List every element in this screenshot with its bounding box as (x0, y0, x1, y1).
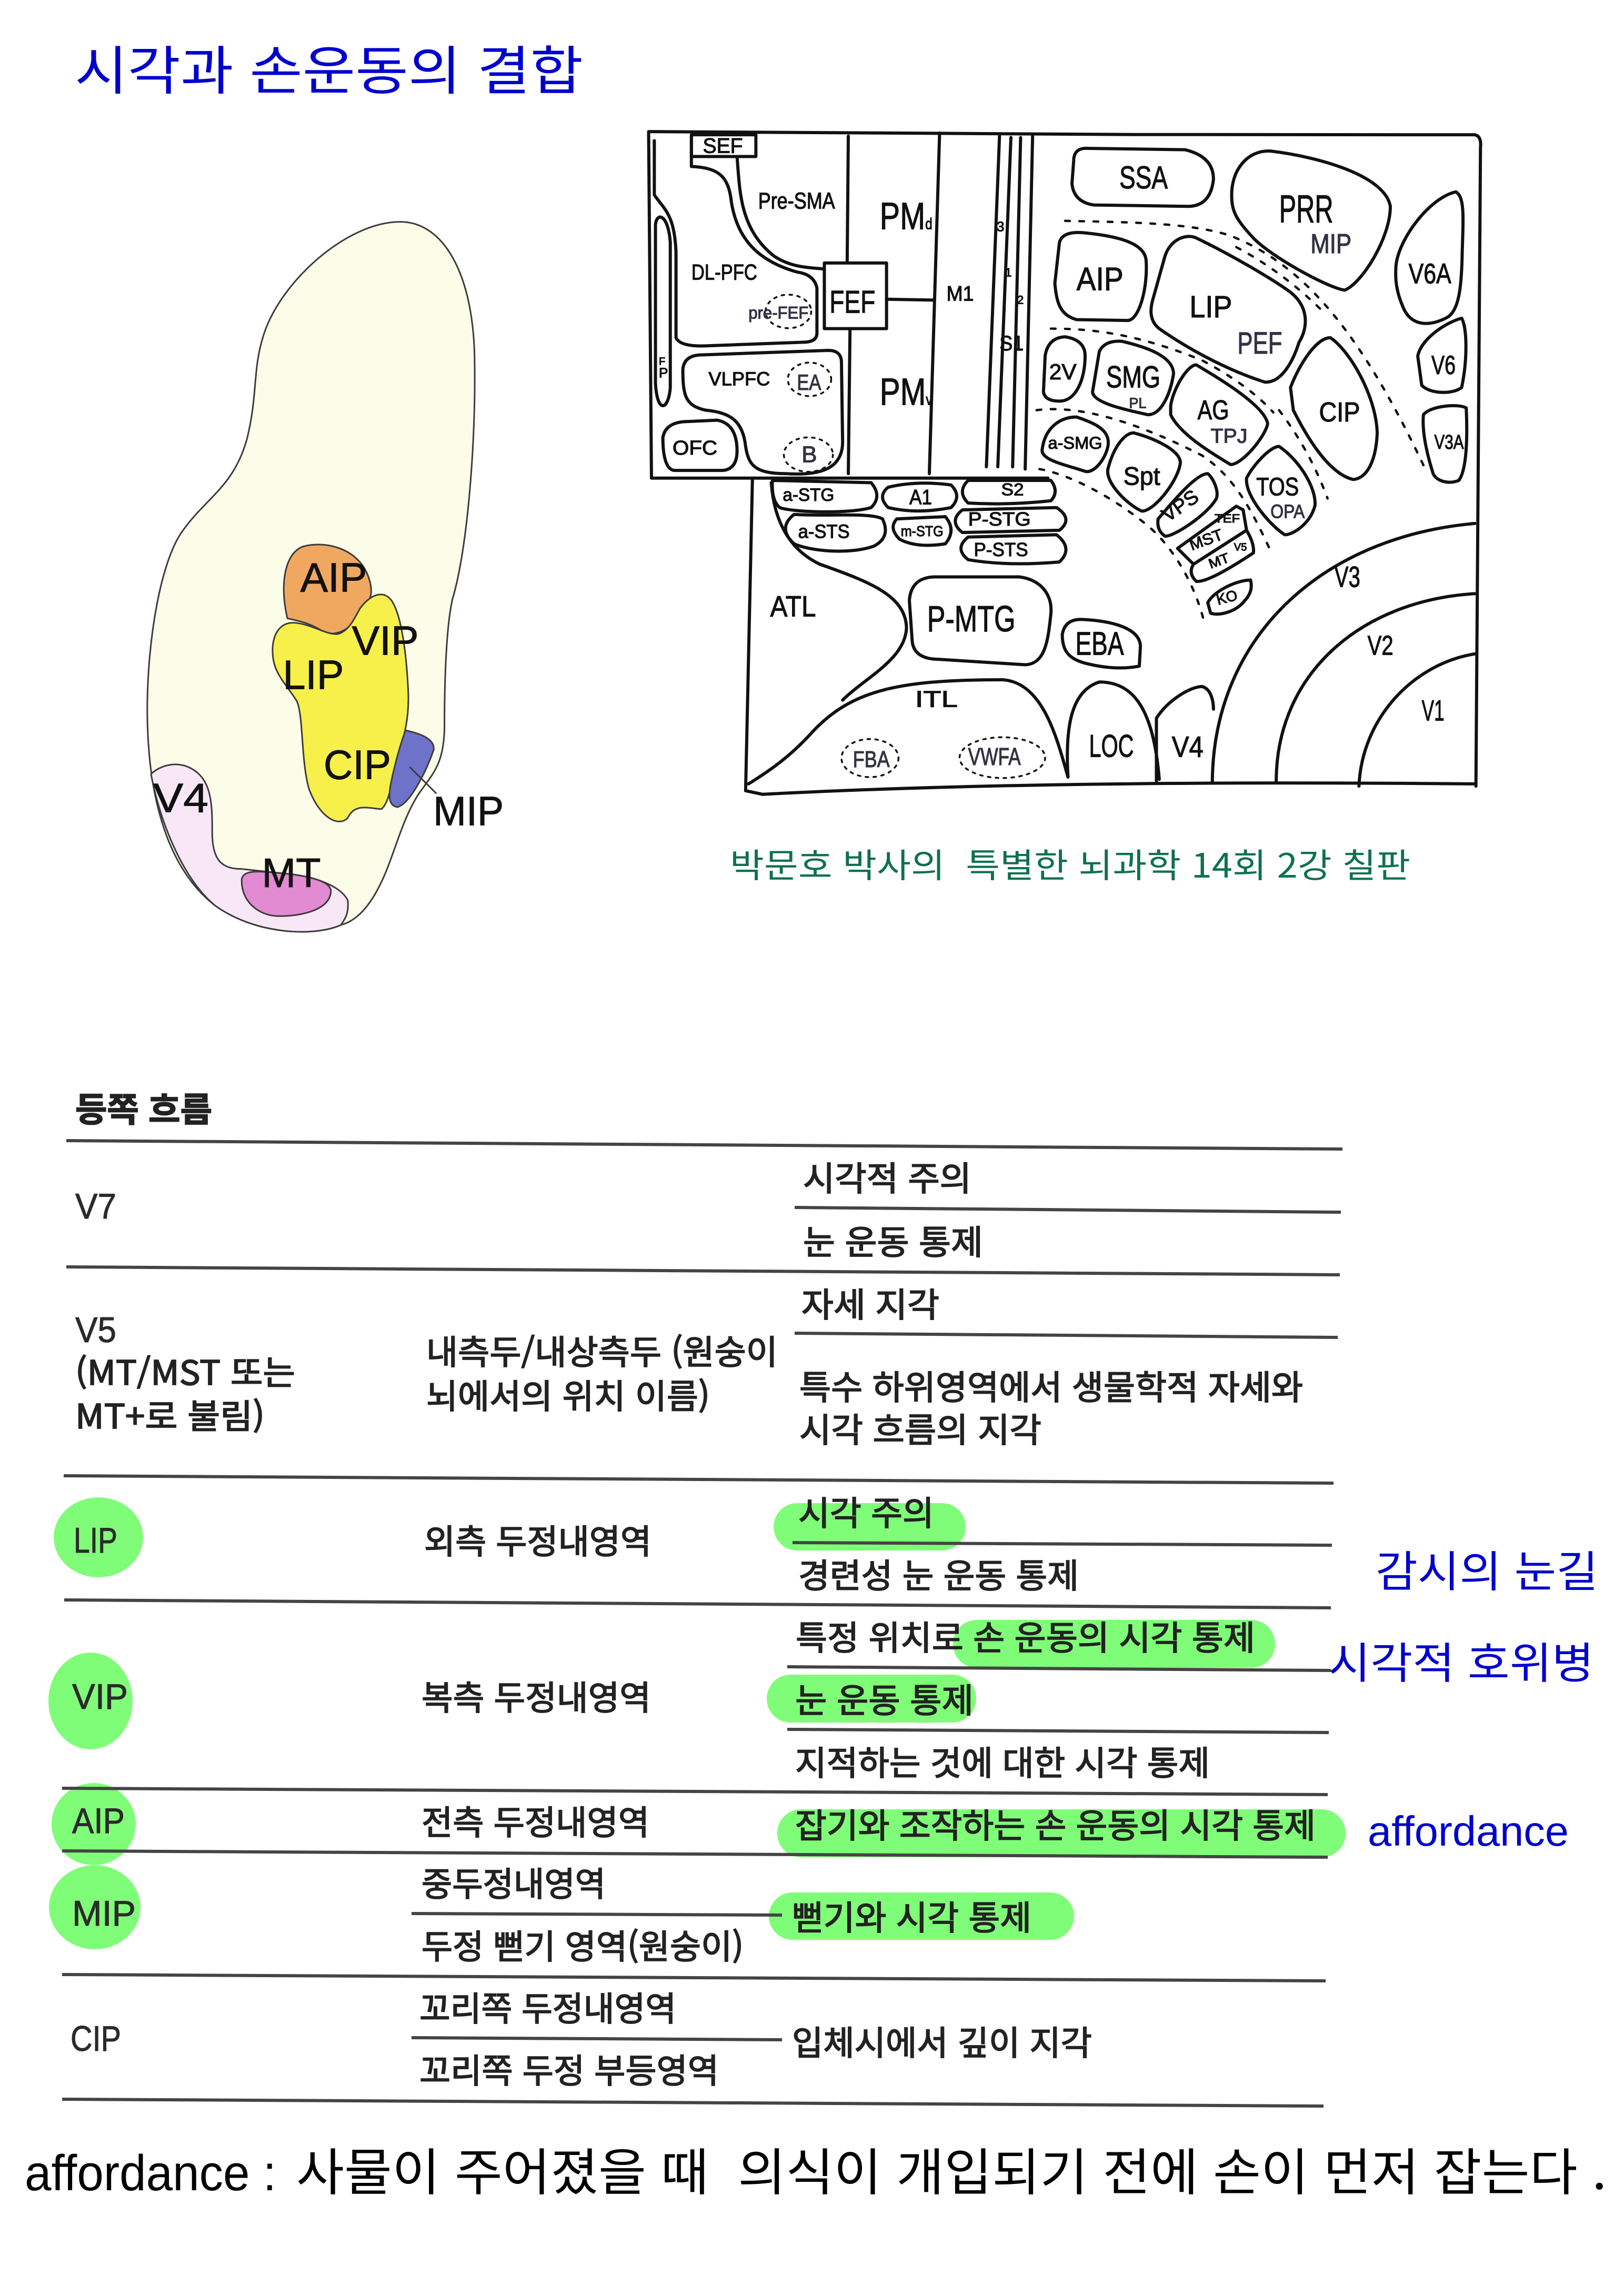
row: CIP: CIP (71, 2019, 121, 2059)
row: VIP: VIP (72, 1677, 128, 1717)
row: V5: 자세 지각 (801, 1278, 939, 1327)
region: MST / TEF: MST (1187, 526, 1225, 554)
area: MT: MT (262, 850, 321, 896)
region: EA: EA (797, 370, 821, 395)
region: a-STS (786, 515, 885, 551)
label: DL-PFC: DL-PFC (691, 260, 757, 285)
row: CIP: 꼬리쪽 두정 부등영역 (419, 2045, 719, 2093)
region: V6: V6 (1431, 350, 1456, 380)
row: LIP: LIP (74, 1520, 117, 1560)
region: A1 (883, 483, 957, 511)
region: P-MTG (909, 577, 1051, 665)
row: CIP: 꼬리쪽 두정내영역 (419, 1982, 676, 2031)
region: B (784, 437, 833, 472)
row: MIP: MIP (72, 1894, 136, 1934)
region: TOS / OPA: TOS (1256, 474, 1299, 501)
row: AIP: AIP (72, 1801, 125, 1841)
area: MIP (389, 730, 504, 834)
region: B: B (801, 442, 817, 468)
area: LIP VIP CIP: LIP (283, 651, 344, 698)
row: LIP: 시각 주의 (798, 1487, 934, 1535)
row: LIP: 경련성 눈 운동 통제 (798, 1549, 1079, 1598)
map frame (649, 132, 1481, 794)
region: KO: KO (1215, 587, 1239, 608)
region: TOS / OPA (1247, 447, 1315, 535)
region: ATL: ATL (770, 589, 816, 622)
region: V3A: V3A (1434, 431, 1464, 454)
frontal lines (654, 133, 1032, 474)
footnote: affordance definition: affordance : (25, 2145, 276, 2201)
annotation: gaze of surveillance: 감시의 눈길 (1376, 1537, 1598, 1599)
row: AIP: 잡기와 조작하는 손 운동의 시각 통제 (795, 1799, 1316, 1848)
row: V7: 눈 운동 통제 (803, 1216, 983, 1264)
area: MT (242, 850, 331, 916)
region: CIP: CIP (1319, 397, 1360, 428)
region: LIP / PEF: LIP (1189, 290, 1232, 324)
region: FP: F (659, 356, 665, 368)
table rules (62, 1141, 1342, 2106)
row: CIP (71, 1982, 1092, 2093)
region: KO (1208, 580, 1251, 614)
row: V5: 특수 하위영역에서 생물학적 자세와 (799, 1361, 1303, 1409)
region: MST / TEF (1178, 506, 1247, 564)
row: V7: 시각적 주의 (803, 1152, 971, 1201)
row: LIP (74, 1487, 1079, 1598)
region: S2: S2 (1001, 480, 1024, 499)
labels: S1 subdivisions (997, 219, 1024, 355)
region: a-STG (773, 480, 877, 512)
region: PRR / MIP (1231, 151, 1390, 290)
region: pre-FEF: pre-FEF (748, 304, 808, 323)
region: V3: V3 (1335, 560, 1360, 593)
region: FBA (841, 739, 898, 777)
region: SEF (691, 135, 756, 158)
region: a-STS: a-STS (798, 520, 850, 542)
region: V1 (1359, 654, 1475, 786)
labels: S1 subdivisions: 3 (997, 219, 1004, 235)
area: V4: V4 (153, 774, 208, 821)
region: Spt: Spt (1124, 463, 1160, 491)
region: EBA: EBA (1076, 626, 1124, 662)
region: ATL (770, 482, 907, 700)
title: 시각과 손운동의 결합 (75, 28, 583, 105)
region: AIP (1055, 233, 1146, 320)
region: Spt (1108, 433, 1180, 511)
area: LIP VIP CIP: VIP (352, 618, 419, 664)
row: V5: 내측두/내상측두 (원숭이 (426, 1326, 778, 1374)
region: VWFA (959, 737, 1045, 778)
region: VLPFC: VLPFC (708, 368, 770, 389)
region: VPS (1158, 474, 1217, 536)
annotation: visual bodyguard: 시각적 호위병 (1328, 1628, 1594, 1691)
row: CIP: 입체시에서 깊이 지각 (792, 2017, 1092, 2065)
region: SSA: SSA (1119, 160, 1168, 195)
region: SMG / PL: PL (1129, 395, 1146, 411)
row: V5: V5 (75, 1310, 116, 1350)
row: VIP: 눈 운동 통제 (795, 1674, 974, 1723)
labels: S1 subdivisions: 2 (1017, 293, 1024, 306)
row: V5: (MT/MST 또는 (75, 1346, 295, 1395)
region: VWFA: VWFA (968, 743, 1021, 770)
region: V4 (1156, 687, 1214, 782)
region: LIP / PEF: PEF (1237, 326, 1282, 360)
row: V5 (75, 1278, 1303, 1452)
region: PRR / MIP: MIP (1310, 229, 1351, 259)
region: ITL: ITL (915, 687, 958, 712)
row: LIP: 외측 두정내영역 (424, 1515, 651, 1564)
region: P-STG (955, 508, 1066, 532)
region: AG / TPJ (1171, 365, 1268, 465)
table: dorsal stream (48, 1083, 1346, 2106)
row: VIP (72, 1612, 1255, 1785)
row: MIP: 두정 뻗기 영역(원숭이) (422, 1920, 744, 1969)
row: V7 (75, 1152, 983, 1264)
row: VIP: 특정 위치로 손 운동의 시각 통제 (796, 1612, 1255, 1660)
region: V2: V2 (1368, 631, 1394, 661)
region: FP (656, 217, 670, 406)
row: VIP: 지적하는 것에 대한 시각 통제 (795, 1737, 1210, 1785)
caption: source of the drawing: 박문호 박사의 특별한 뇌과학 14회 2강 칠판 (730, 839, 1410, 888)
region: a-STG: a-STG (783, 485, 834, 505)
hand-drawn cortical map (649, 132, 1481, 794)
region: m-STG: m-STG (901, 523, 944, 539)
region: SMG / PL: SMG (1106, 360, 1160, 395)
area: AIP: AIP (300, 554, 367, 600)
region: MST / TEF: TEF (1215, 512, 1240, 525)
region: 2V: 2V (1049, 359, 1077, 384)
row: V7: V7 (75, 1186, 116, 1226)
row: V5: MT+로 불림) (75, 1390, 265, 1438)
row: MIP (72, 1858, 1031, 1969)
region: FP: P (659, 365, 668, 381)
region: m-STG (893, 517, 951, 546)
region: ITL (748, 680, 1068, 784)
area: V4 (151, 764, 348, 932)
region: V2 (1276, 593, 1475, 782)
brain diagram: lateral view with parietal areas (147, 222, 504, 932)
region: P-STS (961, 535, 1066, 564)
green highlights (48, 1497, 1346, 1949)
region: LOC: LOC (1089, 728, 1134, 763)
table heading: 등쪽 흐름 (75, 1083, 212, 1132)
dashed area boundaries (1037, 221, 1427, 626)
region: FEF (824, 263, 887, 329)
region: MT / V5: MT (1206, 550, 1231, 572)
area: AIP (284, 545, 371, 633)
region: OFC: OFC (673, 437, 717, 459)
row: AIP (72, 1796, 1316, 1848)
row: VIP: 복측 두정내영역 (422, 1671, 651, 1720)
region: SEF: SEF (703, 135, 743, 158)
brain outline (147, 222, 475, 932)
row: MIP: 중두정내영역 (422, 1858, 606, 1906)
region: V1: V1 (1422, 693, 1445, 727)
region: V6A: V6A (1409, 258, 1451, 290)
region: OFC (663, 420, 737, 470)
region: MT / V5 (1191, 530, 1254, 581)
row: V5: 시각 흐름의 지각 (799, 1404, 1041, 1452)
labels: S1 subdivisions: S1 (999, 332, 1024, 355)
region: LOC (1067, 682, 1159, 779)
region: V3 (1212, 523, 1475, 782)
region: 2V (1044, 337, 1085, 401)
label: PMd: PMd (880, 195, 933, 237)
region: P-STG: P-STG (968, 508, 1031, 530)
region: TOS / OPA: OPA (1270, 501, 1305, 522)
footnote: affordance definition: 사물이 주어졌을 때 의식이 개입되기 전에 손이 먼저 잡는다 . (296, 2132, 1607, 2205)
region: AG / TPJ: TPJ (1210, 426, 1247, 448)
region: PRR / MIP: PRR (1279, 187, 1334, 230)
region: P-STS: P-STS (974, 539, 1028, 560)
row: AIP: 전측 두정내영역 (422, 1796, 649, 1845)
region: A1: A1 (909, 486, 932, 509)
region: AG / TPJ: AG (1198, 395, 1229, 426)
region: V6 (1418, 318, 1466, 392)
row: MIP: 뻗기와 시각 통제 (792, 1891, 1031, 1940)
label: Pre-SMA: Pre-SMA (758, 188, 835, 214)
row: V5: 뇌에서의 위치 이름) (426, 1370, 710, 1418)
region: SMG / PL (1092, 341, 1174, 415)
region: a-SMG (1042, 417, 1108, 471)
area: MIP: MIP (433, 788, 504, 834)
region: P-MTG: P-MTG (927, 598, 1016, 639)
labels: S1 subdivisions: 1 (1005, 266, 1011, 279)
region: V3A (1423, 406, 1467, 482)
region: FEF: FEF (829, 285, 875, 320)
area: LIP VIP CIP: CIP (324, 742, 391, 788)
region: EA (788, 362, 831, 396)
region: EBA (1062, 619, 1140, 668)
annotation: affordance: affordance (1368, 1808, 1569, 1855)
region: S2 (963, 480, 1055, 504)
region: AIP: AIP (1077, 261, 1124, 297)
region: FBA: FBA (853, 747, 890, 772)
region: V4: V4 (1172, 730, 1204, 763)
region: VPS: VPS (1158, 486, 1203, 527)
region: CIP (1290, 338, 1377, 479)
region: LIP / PEF (1151, 236, 1305, 382)
label: PMv: PMv (880, 371, 933, 413)
label: M1: M1 (946, 282, 974, 305)
region: pre-FEF (748, 295, 811, 328)
area: LIP VIP CIP (273, 595, 419, 821)
region: VLPFC (683, 350, 843, 474)
region: a-SMG: a-SMG (1048, 434, 1102, 452)
region: SSA (1072, 148, 1214, 206)
region: MT / V5: V5 (1234, 542, 1247, 553)
region: V6A (1396, 192, 1463, 324)
